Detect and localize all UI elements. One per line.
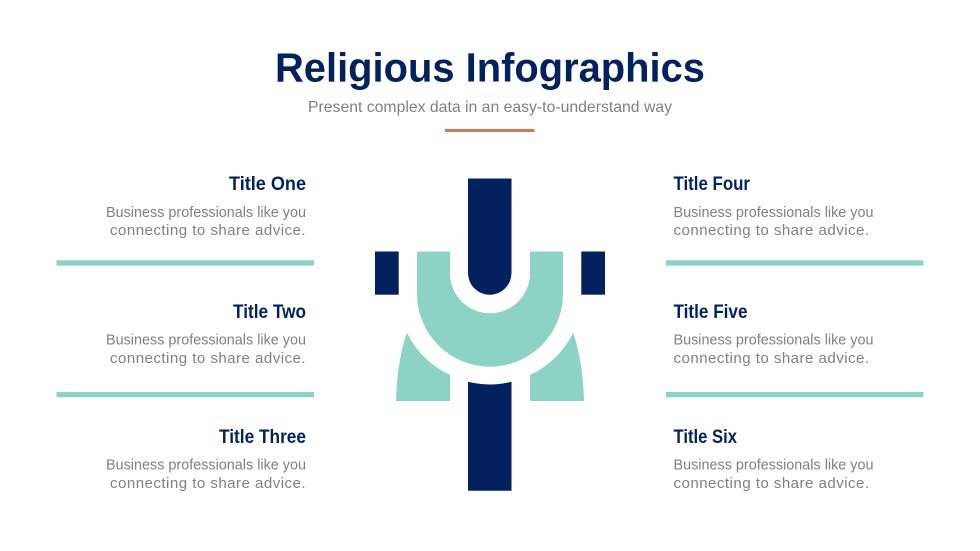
text block: title three <box>106 456 306 492</box>
heading: title two: Title Two <box>233 302 306 323</box>
heading: title six: Title Six <box>674 427 737 448</box>
text block: title one: connecting to share advice. <box>110 222 306 239</box>
icon: right wing <box>530 333 584 401</box>
text block: title two: connecting to share advice. <box>110 350 306 367</box>
text block: title four: connecting to share advice. <box>674 222 870 239</box>
heading: title three: Title Three <box>219 427 306 448</box>
icon: left arm <box>375 252 399 295</box>
text block: title three: Business professionals like you <box>106 456 306 474</box>
text block: title two <box>106 332 306 367</box>
text block: title one: Business professionals like you <box>106 204 306 221</box>
panel: title three <box>106 427 306 492</box>
text block: title two: Business professionals like you <box>106 332 306 348</box>
heading: title four: Title Four <box>674 174 751 195</box>
central cross icon <box>375 178 605 491</box>
panel: title six <box>674 427 874 492</box>
text block: title six <box>674 456 874 492</box>
accent line <box>445 129 534 132</box>
heading: title one: Title One <box>229 174 306 195</box>
text block: title six: connecting to share advice. <box>674 475 870 492</box>
text block: title five: Business professionals like you <box>674 332 874 348</box>
text block: title four: Business professionals like you <box>674 204 874 221</box>
icon: right arm <box>581 252 605 295</box>
text block: title one <box>106 204 306 239</box>
panel: title five <box>674 302 874 367</box>
panel: title one <box>106 174 306 239</box>
title: Religious Infographics <box>275 44 705 90</box>
heading: title five: Title Five <box>674 302 748 323</box>
text block: title six: Business professionals like you <box>674 456 874 474</box>
icon: left wing <box>396 333 450 401</box>
subtitle: Present complex data in an easy-to-understand way <box>308 99 672 116</box>
text block: title four <box>674 204 874 239</box>
text block: title three: connecting to share advice. <box>110 475 306 492</box>
icon: teal U shape <box>417 252 563 367</box>
icon: bottom bar <box>468 382 512 491</box>
text block: title five: connecting to share advice. <box>674 350 870 367</box>
icon: top bar <box>468 178 512 295</box>
panel: title two <box>106 302 306 367</box>
text block: title five <box>674 332 874 367</box>
panel: title four <box>674 174 874 239</box>
